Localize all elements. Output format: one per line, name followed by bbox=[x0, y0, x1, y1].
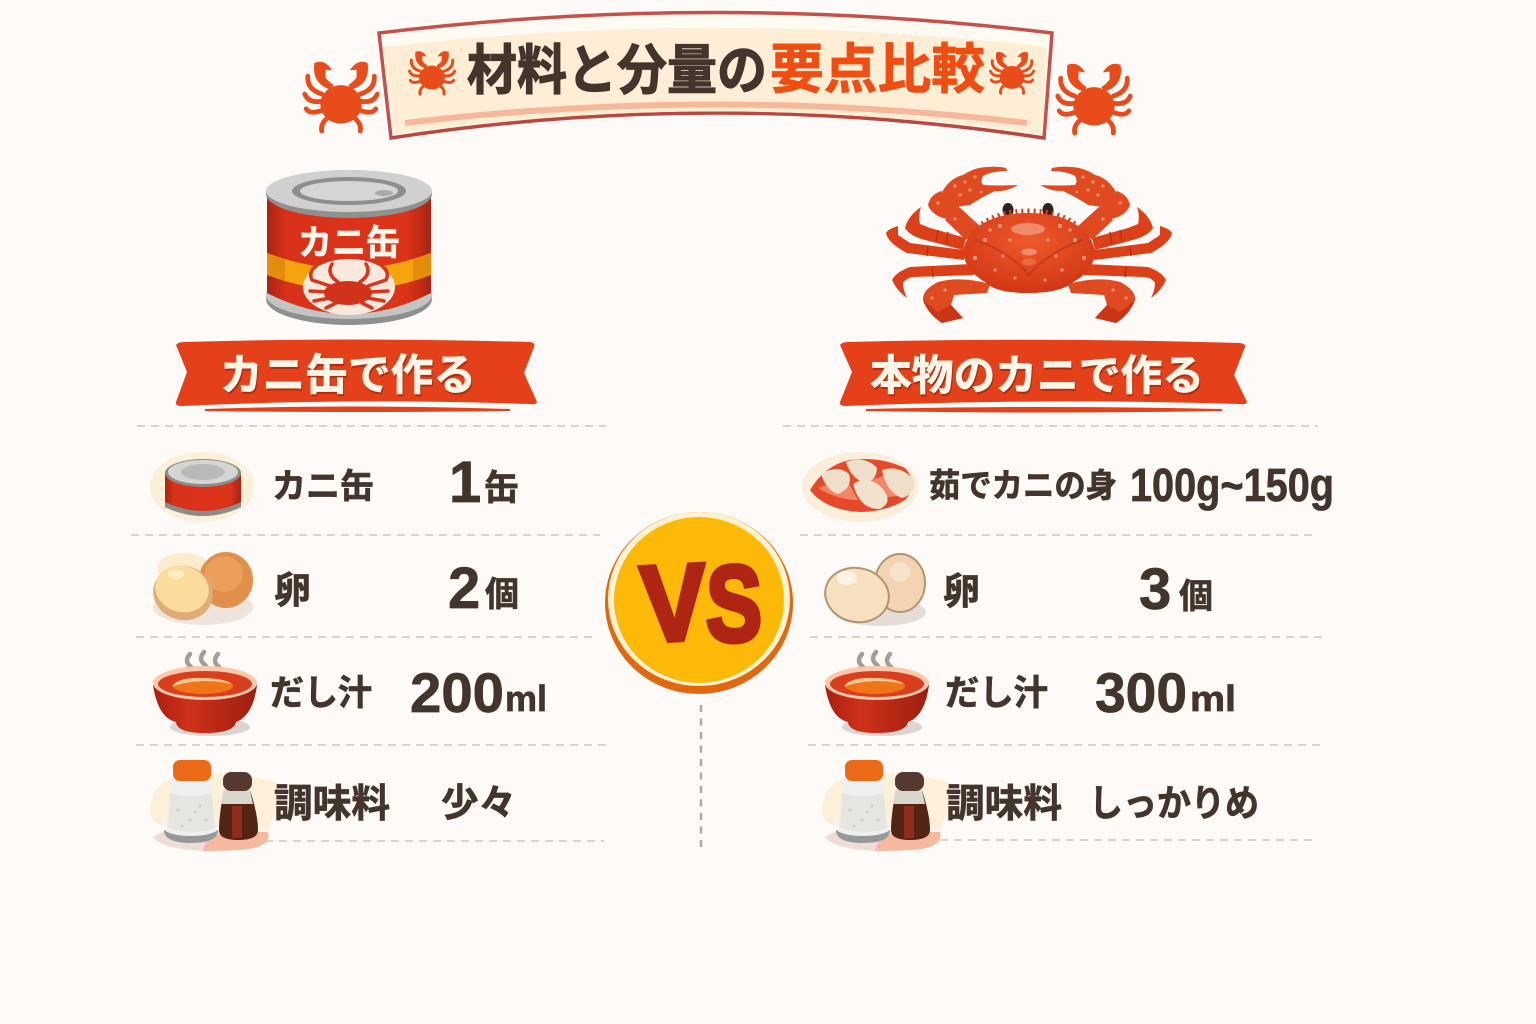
title text: 材料と分量の bbox=[467, 41, 767, 101]
amount: 3 bbox=[1139, 557, 1171, 622]
right heading ribbon bbox=[840, 340, 1247, 412]
VS text: S bbox=[706, 543, 762, 664]
left list: crab can row bbox=[150, 450, 519, 522]
left list: egg row bbox=[147, 552, 519, 627]
VS text bbox=[638, 540, 762, 665]
label: だし汁 bbox=[270, 674, 372, 713]
amount: 個 bbox=[485, 576, 519, 614]
amount: 缶 bbox=[484, 469, 519, 508]
icon: crab in banner left bbox=[409, 51, 455, 94]
label: カニ缶 bbox=[272, 468, 374, 506]
title text bbox=[467, 40, 985, 101]
left heading ribbon bbox=[176, 340, 537, 411]
icon: crab can bbox=[266, 170, 432, 325]
label: だし汁 bbox=[945, 674, 1048, 713]
label: 茹でカニの身 bbox=[929, 467, 1117, 504]
label: 卵 bbox=[274, 570, 311, 611]
VS text: V bbox=[638, 540, 709, 665]
VS badge bbox=[605, 512, 793, 694]
label: 調味料 bbox=[946, 783, 1062, 826]
amount: 個 bbox=[1179, 578, 1213, 616]
icon: small can bbox=[150, 452, 254, 522]
amount: しっかりめ bbox=[1089, 783, 1259, 824]
icon: salt and soy sauce bbox=[822, 760, 958, 851]
icon: boiled crab meat bbox=[802, 452, 918, 522]
amount: 200 bbox=[410, 661, 504, 724]
right list: crab meat row bbox=[802, 452, 1334, 522]
amount: 300 bbox=[1095, 661, 1187, 724]
amount: 100g~150g bbox=[1130, 459, 1334, 511]
icon: eggs bbox=[820, 554, 926, 628]
icon: crab in banner right bbox=[990, 52, 1034, 93]
icon: soup bowl bbox=[825, 652, 929, 736]
amount bbox=[410, 661, 547, 724]
amount: 1 bbox=[449, 450, 481, 515]
right heading text: 本物のカニで作る bbox=[870, 352, 1204, 399]
amount bbox=[449, 450, 519, 515]
left heading text: カニ缶で作る bbox=[220, 352, 476, 400]
icon: crab top far left bbox=[305, 62, 377, 131]
left list: dashi row bbox=[153, 652, 547, 736]
amount: ml bbox=[505, 678, 547, 719]
dashed dividers bbox=[131, 426, 1326, 853]
title banner bbox=[379, 12, 1052, 138]
amount bbox=[1095, 661, 1236, 724]
amount: 少々 bbox=[441, 783, 516, 825]
amount: ml bbox=[1190, 678, 1236, 719]
label: 調味料 bbox=[274, 783, 390, 826]
title text: 要点比較 bbox=[770, 40, 985, 100]
icon: salt and soy sauce bbox=[150, 760, 286, 851]
icon: soup bowl bbox=[153, 652, 257, 736]
icon: crab top far right bbox=[1058, 64, 1130, 133]
right list: seasoning row bbox=[822, 760, 1259, 851]
amount bbox=[1139, 557, 1213, 622]
left list: seasoning row bbox=[150, 760, 516, 851]
right list: egg row bbox=[820, 554, 1213, 628]
amount bbox=[448, 556, 519, 621]
icon: eggs bbox=[147, 552, 253, 627]
amount: 2 bbox=[448, 556, 480, 621]
label: 卵 bbox=[943, 571, 980, 612]
icon: real crab bbox=[886, 167, 1172, 323]
can label: カニ缶 bbox=[298, 224, 400, 263]
right list: dashi row bbox=[825, 652, 1236, 736]
